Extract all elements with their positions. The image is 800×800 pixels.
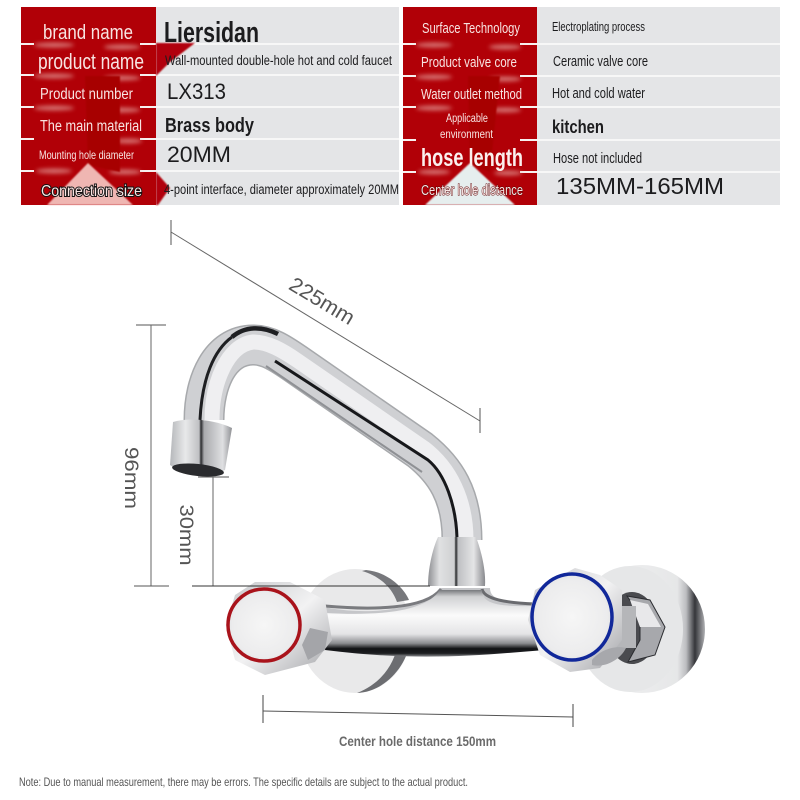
right label column: [403, 7, 537, 205]
hex nut: [627, 596, 665, 662]
label column separators: [21, 43, 156, 172]
footnote: Note: Due to manual measurement, there may be errors. The specific details are subject to the actual product.: [19, 775, 468, 789]
row: applicable environment: environment: [440, 129, 494, 141]
row: hose length: [421, 144, 642, 172]
row: product valve core: Ceramic valve core: [553, 54, 648, 70]
label column separators: [403, 43, 537, 173]
row: surface technology: Electroplating process: [552, 20, 645, 34]
dimension: center hole distance: Center hole distance 150mm: [339, 733, 496, 749]
row: brand name: brand name: [43, 22, 133, 44]
dimension: height 96mm: 96mm: [120, 447, 141, 509]
row: connection size: Connection size: [41, 183, 142, 200]
row: main material: The main material: [40, 118, 142, 135]
dimension: center hole distance: [263, 695, 573, 749]
red ring: [228, 589, 300, 661]
row: main material: Brass body: [165, 115, 255, 137]
spout tube: [200, 328, 466, 540]
row: mounting hole diameter: [39, 142, 231, 167]
row: applicable environment: kitchen: [552, 117, 604, 137]
row: product valve core: [421, 54, 648, 71]
row: center hole distance: [421, 173, 724, 199]
row: hose length: hose length: [421, 144, 523, 172]
dimension: clearance 30mm: [175, 477, 229, 586]
blue ring: [532, 574, 612, 660]
panel: specification table left: [21, 7, 399, 205]
dimension: spout length 225mm: 225mm: [285, 273, 359, 330]
hot water handle: [226, 582, 332, 675]
right value column: [537, 7, 780, 205]
pink triangle accent: [47, 163, 133, 205]
baseline reference: [192, 585, 430, 587]
row: hose length: Hose not included: [553, 151, 642, 167]
dimension: clearance 30mm: 30mm: [175, 504, 196, 566]
row: product name: Wall-mounted double-hole hot and cold faucet: [165, 53, 392, 68]
dimension: spout length 225mm: [171, 220, 480, 433]
row: connection size: [41, 182, 399, 200]
row: water outlet method: [421, 86, 645, 103]
aerator: [170, 420, 232, 479]
upper cross pipe: [320, 588, 540, 625]
row: product number: [40, 79, 226, 104]
row: main material: [40, 115, 255, 137]
row: brand name: Liersidan: [164, 17, 259, 49]
rear left wall flange: [299, 569, 411, 693]
spout collar: [428, 537, 485, 586]
row: applicable environment: [440, 113, 604, 141]
left value column: [156, 7, 399, 205]
row: product number: LX313: [167, 79, 226, 104]
row: product valve core: Product valve core: [421, 55, 517, 71]
illustration: chrome faucet: [170, 328, 705, 693]
decorative dark band: [468, 76, 500, 172]
row: surface technology: [422, 20, 645, 37]
row: center hole distance: Center hole distance: [421, 183, 523, 199]
decorative red wedges: [85, 43, 195, 205]
row: product name: product name: [38, 49, 144, 74]
pale triangle accent: [425, 163, 515, 205]
row: water outlet method: Hot and cold water: [552, 86, 645, 102]
row: mounting hole diameter: Mounting hole diameter: [39, 148, 134, 162]
row: mounting hole diameter: 20MM: [167, 142, 231, 167]
rear right wall flange: [577, 565, 705, 693]
row: connection size: 4-point interface, diameter approximately 20MM: [164, 182, 399, 197]
nut cavity: [606, 592, 658, 664]
cold water handle: [528, 568, 626, 672]
separator smudges: [416, 42, 522, 176]
left label column: [21, 7, 156, 205]
panel: specification table right: [403, 7, 780, 205]
row: applicable environment: Applicable: [446, 113, 488, 125]
separator smudges: [34, 42, 142, 174]
row: product number: Product number: [40, 86, 134, 103]
row: surface technology: Surface Technology: [422, 21, 521, 37]
row: brand name: [43, 17, 259, 49]
row: center hole distance: 135MM-165MM: [556, 173, 724, 199]
row: water outlet method: Water outlet method: [421, 87, 522, 103]
mixer body: [325, 590, 545, 657]
row: product name: [38, 49, 392, 74]
